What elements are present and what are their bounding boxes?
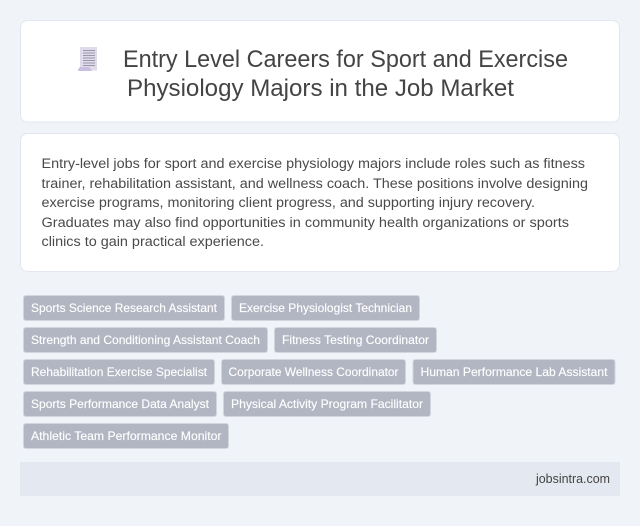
footer source text: jobsintra.com — [535, 472, 610, 486]
title: Physiology Majors in the Job Market — [127, 75, 514, 102]
footer bar — [20, 462, 620, 496]
title — [123, 46, 568, 102]
text block: description paragraph: exercise programs, monitoring client progress, and supporting injury recovery. — [42, 195, 535, 211]
tag: Athletic Team Performance Monitor — [24, 424, 228, 448]
tag: Exercise Physiologist Technician: Exercise Physiologist Technician — [239, 301, 412, 315]
tag: Exercise Physiologist Technician — [232, 296, 420, 320]
text block: description paragraph: trainer, rehabilitation assistant, and wellness coach. These positions involve designing — [42, 176, 588, 192]
tag: Rehabilitation Exercise Specialist: Rehabilitation Exercise Specialist — [31, 365, 208, 379]
tag: Sports Performance Data Analyst — [24, 392, 216, 416]
text block: description paragraph — [42, 156, 588, 250]
tag: Strength and Conditioning Assistant Coach: Strength and Conditioning Assistant Coach — [31, 333, 260, 347]
tag: Human Performance Lab Assistant — [413, 360, 615, 384]
tag: Fitness Testing Coordinator — [274, 328, 436, 352]
tag: Sports Performance Data Analyst: Sports Performance Data Analyst — [31, 397, 210, 411]
text block: description paragraph: clinics to gain practical experience. — [42, 234, 264, 250]
tag: Sports Science Research Assistant: Sports Science Research Assistant — [31, 301, 218, 315]
text block: description paragraph: Graduates may also find opportunities in community health organizations or sports — [42, 215, 569, 231]
tag: Human Performance Lab Assistant: Human Performance Lab Assistant — [420, 365, 608, 379]
tag: Fitness Testing Coordinator: Fitness Testing Coordinator — [282, 333, 429, 347]
icon: document scroll — [78, 47, 97, 71]
tag: Sports Science Research Assistant — [24, 296, 224, 320]
tag: Rehabilitation Exercise Specialist — [24, 360, 214, 384]
tag: Corporate Wellness Coordinator — [222, 360, 406, 384]
tag: Strength and Conditioning Assistant Coach — [24, 328, 268, 352]
panel: job tags — [24, 296, 615, 448]
tag: Corporate Wellness Coordinator: Corporate Wellness Coordinator — [228, 365, 398, 379]
panel: description — [20, 134, 620, 272]
tag: Athletic Team Performance Monitor: Athletic Team Performance Monitor — [31, 429, 222, 443]
tag: Physical Activity Program Facilitator — [224, 392, 430, 416]
title: Entry Level Careers for Sport and Exercise — [123, 46, 568, 73]
panel: title card — [20, 20, 620, 122]
tag: Physical Activity Program Facilitator: Physical Activity Program Facilitator — [231, 397, 423, 411]
text block: description paragraph: Entry-level jobs for sport and exercise physiology majors include roles such as fitness — [42, 156, 585, 172]
